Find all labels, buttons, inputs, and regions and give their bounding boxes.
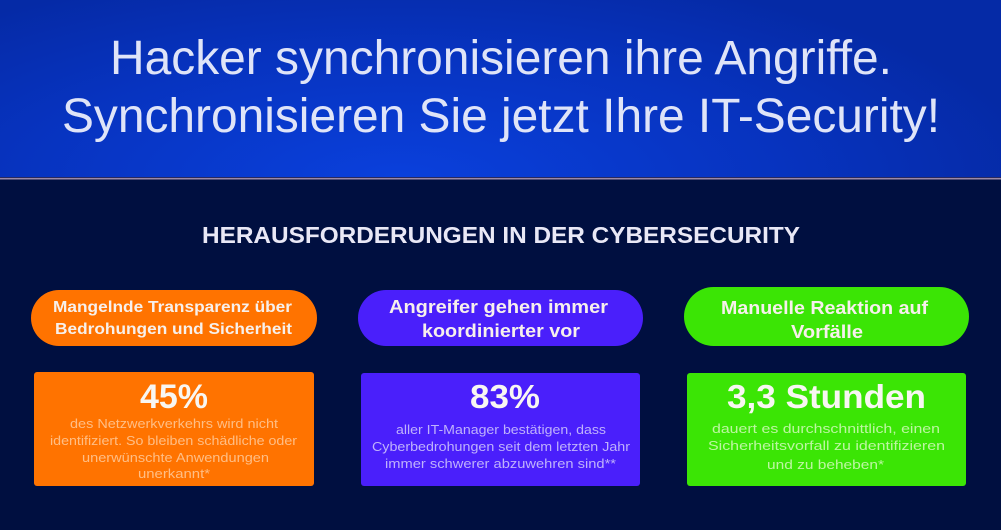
purple card description: aller IT-Manager bestätigen, dass [396, 423, 606, 437]
section heading: HERAUSFORDERUNGEN IN DER CYBERSECURITY [202, 222, 800, 248]
green pill heading [684, 287, 969, 346]
purple card description: immer schwerer abzuwehren sind** [385, 457, 616, 471]
panel: green column [684, 287, 969, 486]
orange pill heading: Mangelnde Transparenz über [53, 299, 292, 316]
purple card description: Cyberbedrohungen seit dem letzten Jahr [372, 440, 630, 454]
orange card description: identifiziert. So bleiben schädliche oder [50, 434, 297, 448]
green stat card [687, 373, 966, 486]
purple card description [372, 423, 630, 471]
panel: orange column [31, 290, 317, 486]
orange card description: unerkannt* [138, 467, 210, 481]
green pill heading: Vorfälle [791, 322, 863, 342]
orange card description [50, 417, 297, 481]
title: Hacker synchronisieren ihre Angriffe. [110, 32, 892, 85]
purple pill heading: koordinierter vor [422, 321, 580, 341]
green card description: dauert es durchschnittlich, einen [712, 422, 940, 436]
orange pill heading: Bedrohungen und Sicherheit [55, 321, 292, 338]
purple stat card [361, 373, 640, 486]
green card description: und zu beheben* [767, 458, 884, 472]
purple pill heading [358, 290, 643, 346]
title [62, 32, 940, 143]
stat: 3,3 Stunden: 3,3 Stunden [727, 378, 926, 415]
green card description [708, 422, 945, 472]
header banner [0, 0, 1001, 180]
green pill heading: Manuelle Reaktion auf [721, 298, 929, 318]
orange stat card [34, 372, 314, 486]
orange pill heading [31, 290, 317, 346]
green card description: Sicherheitsvorfall zu identifizieren [708, 439, 945, 453]
stat: 45%: 45% [140, 378, 208, 416]
orange card description: unerwünschte Anwendungen [82, 451, 269, 465]
title: Synchronisieren Sie jetzt Ihre IT-Security! [62, 90, 940, 143]
orange card description: des Netzwerkverkehrs wird nicht [70, 417, 279, 431]
purple pill heading: Angreifer gehen immer [389, 297, 608, 317]
panel: purple column [358, 290, 643, 486]
stat: 83%: 83% [470, 378, 540, 415]
